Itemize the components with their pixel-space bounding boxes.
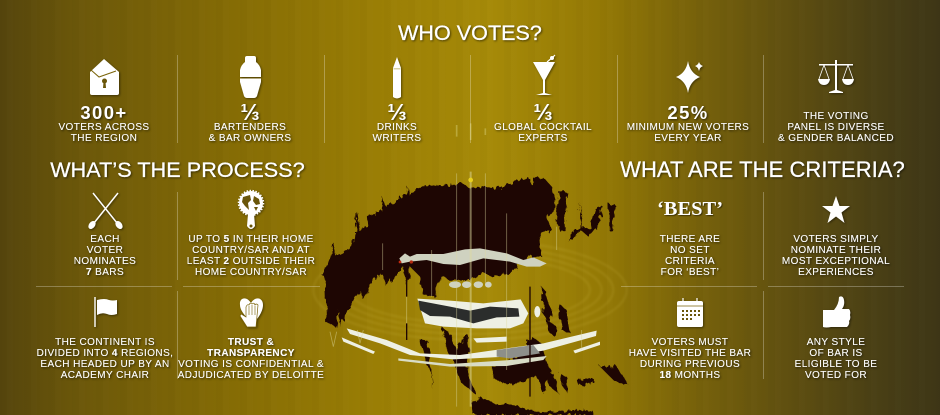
icon: pencil (392, 57, 404, 100)
item: nominates 7 bars: 7 BARS (86, 266, 124, 278)
item: global cocktail experts: GLOBAL COCKTAIL (494, 122, 592, 132)
icon: ballot box with keyhole (90, 59, 121, 97)
item: trust and transparency: ADJUDICATED BY DELOITTE (178, 370, 324, 380)
item: drinks writers: DRINKS (377, 122, 417, 132)
item: nominates 7 bars: NOMINATES (74, 256, 136, 266)
item: 25% new voters: EVERY YEAR (654, 132, 722, 144)
item: trust and transparency: VOTING IS CONFIDENTIAL & (178, 358, 324, 370)
item: nominates 7 bars: EACH (90, 234, 120, 244)
item: visited bar: 18 MONTHS (659, 370, 721, 380)
item: trust and transparency: TRUST & (228, 336, 274, 348)
icon: sparkle (676, 61, 704, 93)
item: global cocktail experts: EXPERTS (518, 132, 568, 144)
item: four regions: ACADEMY CHAIR (61, 370, 149, 380)
icon: star (822, 196, 850, 224)
heading: what are the criteria: WHAT ARE THE CRITERIA? (620, 157, 905, 182)
panel: criteria (621, 192, 904, 380)
item: home country votes (187, 190, 316, 278)
item: nominate exceptional: NOMINATE THEIR (791, 244, 881, 256)
item: nominate exceptional (782, 196, 890, 278)
item: 300+ voters: VOTERS ACROSS (58, 122, 150, 132)
item: 300+ voters (58, 59, 150, 144)
icon: best wordmark: ‘BEST’ (657, 198, 723, 220)
item: trust and transparency: TRANSPARENCY (207, 348, 295, 358)
item: no set criteria: THERE ARE (660, 234, 720, 244)
item: no set criteria: FOR ‘BEST’ (661, 266, 719, 278)
panel: who votes (58, 54, 895, 144)
item: four regions: EACH HEADED UP BY AN (40, 358, 170, 370)
item: 300+ voters: THE REGION (71, 132, 137, 144)
central graphic: distorted lips reflection with ripples (321, 123, 628, 415)
item: any style of bar: ANY STYLE (807, 336, 865, 348)
heading: what's the process: WHAT’S THE PROCESS? (50, 157, 305, 182)
item: four regions: DIVIDED INTO 4 REGIONS, (37, 348, 173, 358)
item: home country votes: UP TO 5 IN THEIR HOME (188, 234, 314, 244)
item: nominate exceptional: MOST EXCEPTIONAL (782, 256, 890, 266)
icon: flag (94, 297, 119, 328)
title: who votes: WHO VOTES? (398, 21, 542, 45)
item: visited bar: DURING PREVIOUS (640, 358, 740, 370)
icon: strainer globe (238, 190, 266, 231)
icon: thumbs up (823, 296, 852, 330)
item: visited bar (629, 298, 752, 380)
item: nominates 7 bars: VOTER (87, 244, 123, 256)
item: drinks writers (372, 57, 423, 144)
item: bartenders: ⅓ (240, 99, 260, 125)
item: 25% new voters: 25% (667, 102, 709, 123)
item: home country votes: LEAST 2 OUTSIDE THEIR (187, 256, 315, 266)
item: drinks writers: ⅓ (387, 99, 407, 125)
item: four regions: THE CONTINENT IS (55, 336, 155, 348)
item: 25% new voters: MINIMUM NEW VOTERS (627, 122, 749, 132)
icon: balance scales (818, 60, 856, 95)
item: no set criteria: NO SET (670, 244, 710, 256)
item: bartenders (208, 56, 293, 144)
panel: process (36, 190, 325, 380)
item: diverse panel: PANEL IS DIVERSE (787, 122, 885, 132)
item: any style of bar (795, 296, 877, 380)
icon: crossed bar spoons (88, 192, 124, 231)
item: diverse panel (778, 60, 895, 144)
item: nominates 7 bars (74, 192, 138, 278)
item: home country votes: HOME COUNTRY/SAR (195, 266, 307, 278)
item: any style of bar: OF BAR IS (809, 348, 863, 358)
item: drinks writers: WRITERS (372, 132, 422, 144)
item: global cocktail experts (494, 54, 593, 144)
item: nominate exceptional: EXPERIENCES (798, 266, 874, 278)
item: any style of bar: ELIGIBLE TO BE (795, 358, 877, 370)
item: no set criteria (657, 198, 723, 278)
icon: martini glass (533, 54, 557, 98)
item: no set criteria: CRITERIA (665, 256, 715, 266)
item: home country votes: COUNTRY/SAR AND AT (192, 244, 310, 256)
item: any style of bar: VOTED FOR (805, 370, 867, 380)
item: diverse panel: & GENDER BALANCED (778, 132, 894, 144)
item: global cocktail experts: ⅓ (533, 99, 553, 125)
item: bartenders: BARTENDERS (214, 122, 286, 132)
item: 25% new voters (627, 61, 750, 144)
item: trust and transparency (178, 298, 325, 380)
icon: cocktail shaker (240, 56, 263, 100)
item: four regions (37, 297, 174, 380)
item: diverse panel: THE VOTING (803, 110, 869, 122)
item: 300+ voters: 300+ (80, 102, 128, 123)
item: visited bar: HAVE VISITED THE BAR (629, 348, 751, 358)
item: nominate exceptional: VOTERS SIMPLY (793, 234, 879, 244)
icon: hand on heart (240, 298, 265, 330)
icon: calendar (677, 298, 705, 329)
item: visited bar: VOTERS MUST (652, 336, 728, 348)
item: bartenders: & BAR OWNERS (209, 132, 291, 144)
